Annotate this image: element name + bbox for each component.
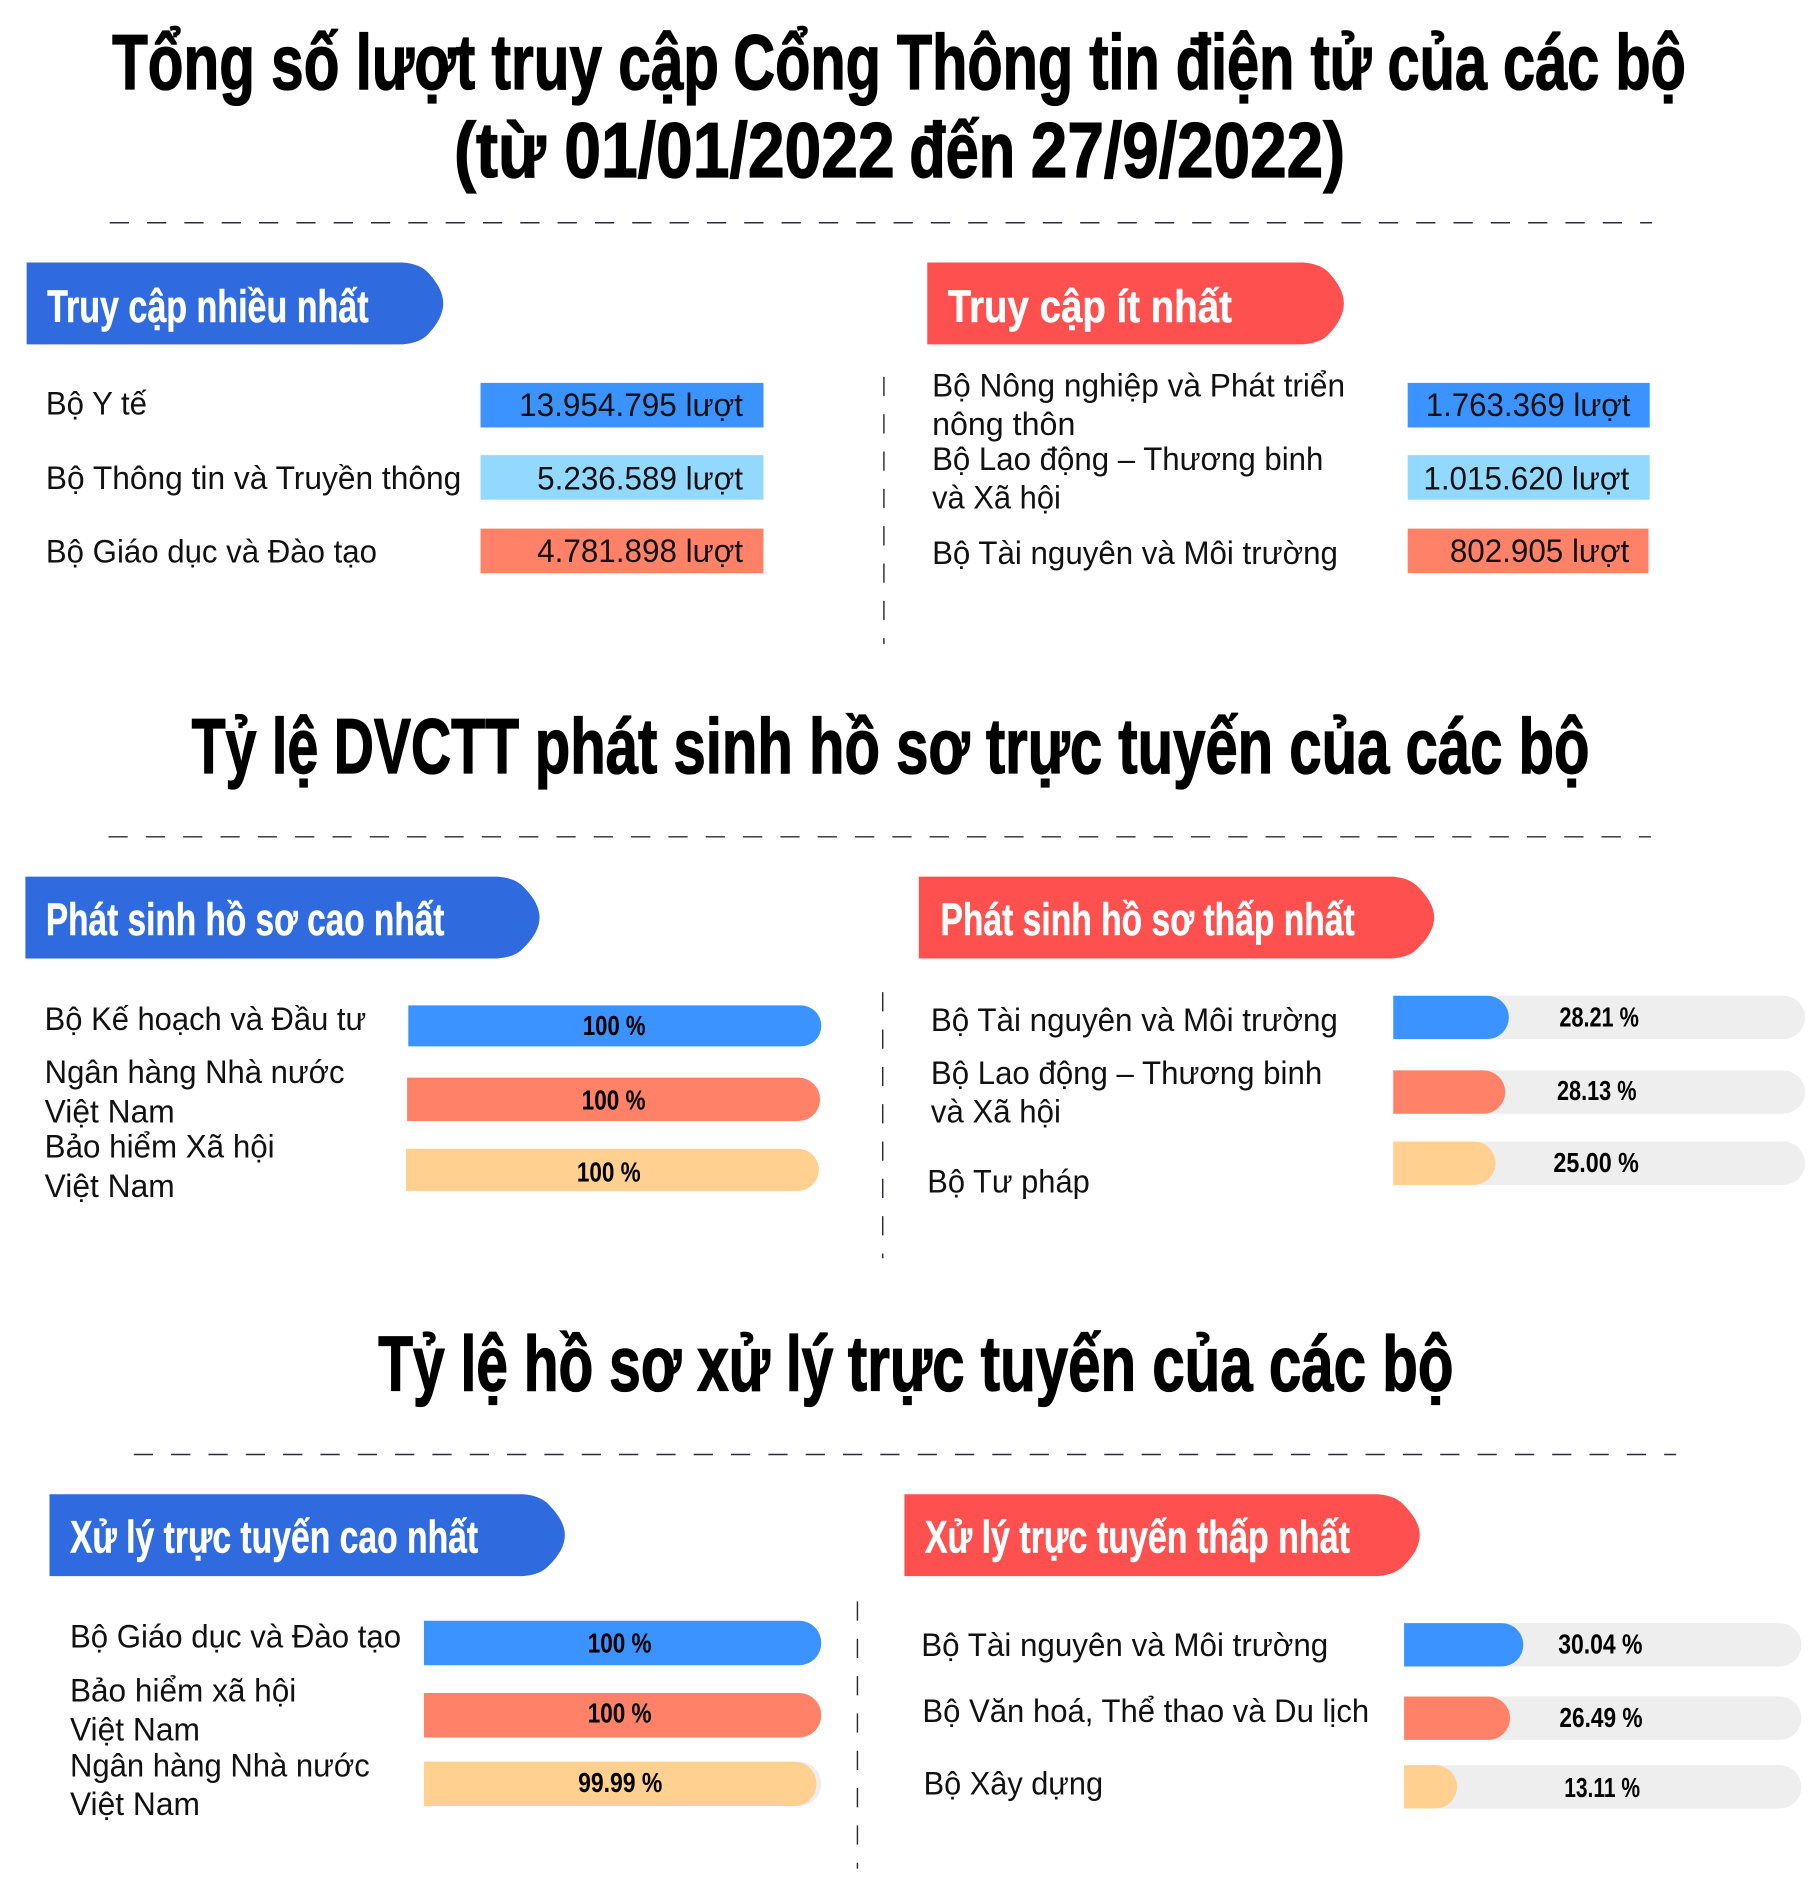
title: online application rate <box>192 702 1590 790</box>
row: Bảo hiểm xã hội Việt Nam: 100 % <box>588 1697 652 1728</box>
row: Bộ Lao động – Thương binh và Xã hội: và Xã hội <box>932 479 1061 515</box>
row: Bộ Lao động – Thương binh và Xã hội: Bộ Lao động – Thương binh <box>932 441 1323 477</box>
row: Bộ Lao động – Thương binh và Xã hội: Bộ Lao động – Thương binh <box>931 1055 1322 1091</box>
row: Ngân hàng Nhà nước Việt Nam <box>45 1054 820 1130</box>
heading badge: lowest application rate <box>919 877 1434 958</box>
row: Bộ Thông tin và Truyền thông: Bộ Thông tin và Truyền thông <box>46 460 461 496</box>
row: Bộ Tài nguyên và Môi trường <box>932 529 1649 573</box>
row: Bộ Tài nguyên và Môi trường: 802.905 lượt <box>1450 533 1629 569</box>
heading badge: lowest processing rate: Xử lý trực tuyến thấp nhất <box>925 1512 1350 1563</box>
row: Bộ Thông tin và Truyền thông <box>46 455 764 500</box>
heading badge: highest application rate <box>25 877 540 958</box>
heading badge: highest processing rate: Xử lý trực tuyến cao nhất <box>70 1512 478 1563</box>
row: Bảo hiểm xã hội Việt Nam: Việt Nam <box>70 1711 200 1747</box>
title: online application rate: Tỷ lệ DVCTT <box>192 702 519 790</box>
row: Bộ Giáo dục và Đào tạo: 100 % <box>588 1627 652 1658</box>
row: Bộ Tài nguyên và Môi trường: 30.04 % <box>1558 1629 1642 1660</box>
row: Bộ Y tế: Bộ Y tế <box>46 386 147 422</box>
row: Bộ Giáo dục và Đào tạo: 4.781.898 lượt <box>537 533 743 569</box>
row: Bảo hiểm Xã hội Việt Nam: 100 % <box>577 1157 641 1188</box>
row: Bộ Y tế: 13.954.795 lượt <box>519 387 743 423</box>
row: Bộ Kế hoạch và Đầu tư: 100 % <box>583 1010 646 1041</box>
panel: lowest processing rate <box>904 1494 1801 1809</box>
row: Bộ Lao động – Thương binh và Xã hội <box>932 441 1650 515</box>
row: Bộ Lao động – Thương binh và Xã hội: và Xã hội <box>931 1094 1061 1130</box>
row: Bảo hiểm Xã hội Việt Nam <box>45 1128 819 1204</box>
title: total visits: 27/9/2022) <box>1031 106 1345 194</box>
title: total visits: đến <box>909 106 1015 194</box>
row: Bộ Tư pháp: Bộ Tư pháp <box>927 1163 1090 1199</box>
panel: highest application rate <box>25 877 821 1204</box>
row: Bộ Y tế <box>46 383 764 427</box>
row: Bộ Tài nguyên và Môi trường: Bộ Tài nguyên và Môi trường <box>921 1627 1328 1663</box>
row: Bảo hiểm xã hội Việt Nam: Bảo hiểm xã hội <box>70 1673 296 1709</box>
heading badge: most visited <box>27 262 443 344</box>
row: Bộ Lao động – Thương binh và Xã hội: 1.015.620 lượt <box>1423 461 1629 497</box>
row: Bộ Thông tin và Truyền thông: 5.236.589 lượt <box>537 461 743 497</box>
heading badge: most visited: Truy cập nhiều nhất <box>47 281 369 332</box>
row: Ngân hàng Nhà nước Việt Nam: Ngân hàng Nhà nước <box>45 1054 344 1090</box>
row: Bộ Tài nguyên và Môi trường: Bộ Tài nguyên và Môi trường <box>931 1002 1338 1038</box>
panel: highest processing rate <box>49 1494 821 1822</box>
title: total visits <box>112 18 1686 194</box>
row: Bộ Giáo dục và Đào tạo: Bộ Giáo dục và Đào tạo <box>70 1619 401 1655</box>
row: Bộ Văn hoá, Thể thao và Du lịch <box>922 1693 1801 1740</box>
row: Bộ Giáo dục và Đào tạo <box>46 529 764 573</box>
row: Ngân hàng Nhà nước Việt Nam: Ngân hàng Nhà nước <box>70 1747 370 1783</box>
title: online processing rate <box>378 1320 1453 1408</box>
row: Bộ Tư pháp: 25.00 % <box>1553 1147 1639 1178</box>
title: online processing rate: trực tuyến của các bộ <box>848 1320 1453 1408</box>
row: Bộ Xây dựng: Bộ Xây dựng <box>924 1765 1103 1801</box>
row: Bảo hiểm xã hội Việt Nam <box>70 1673 821 1747</box>
row: Bộ Văn hoá, Thể thao và Du lịch: 26.49 % <box>1559 1702 1642 1733</box>
row: Bảo hiểm Xã hội Việt Nam: Bảo hiểm Xã hội <box>45 1128 275 1164</box>
row: Bộ Nông nghiệp và Phát triển nông thôn: nông thôn <box>932 406 1075 442</box>
row: Bộ Xây dựng <box>924 1765 1801 1809</box>
title: online processing rate: Tỷ lệ hồ sơ xử lý <box>378 1320 834 1408</box>
panel: least visited <box>927 262 1650 573</box>
heading badge: highest processing rate <box>49 1494 565 1576</box>
row: Bộ Nông nghiệp và Phát triển nông thôn: Bộ Nông nghiệp và Phát triển <box>932 368 1345 404</box>
row: Ngân hàng Nhà nước Việt Nam: 100 % <box>582 1084 646 1115</box>
row: Bộ Văn hoá, Thể thao và Du lịch: Bộ Văn hoá, Thể thao và Du lịch <box>922 1693 1369 1729</box>
panel: most visited <box>27 262 764 573</box>
heading badge: least visited <box>927 262 1344 344</box>
row: Bộ Tài nguyên và Môi trường: Bộ Tài nguyên và Môi trường <box>932 535 1338 571</box>
row: Bộ Xây dựng: 13.11 % <box>1564 1772 1640 1803</box>
row: Bộ Giáo dục và Đào tạo: Bộ Giáo dục và Đào tạo <box>46 534 377 570</box>
heading badge: lowest application rate: Phát sinh hồ sơ thấp nhất <box>941 894 1355 945</box>
row: Bộ Tài nguyên và Môi trường: 28.21 % <box>1559 1001 1639 1032</box>
row: Bộ Tài nguyên và Môi trường <box>921 1623 1801 1666</box>
row: Ngân hàng Nhà nước Việt Nam <box>70 1747 821 1822</box>
title: total visits: (từ 01/01/2022 <box>454 106 895 194</box>
row: Bộ Giáo dục và Đào tạo <box>70 1619 821 1665</box>
row: Ngân hàng Nhà nước Việt Nam: 99.99 % <box>578 1767 662 1798</box>
row: Bộ Kế hoạch và Đầu tư: Bộ Kế hoạch và Đầu tư <box>45 1001 366 1037</box>
panel: lowest application rate <box>919 877 1805 1199</box>
row: Bảo hiểm Xã hội Việt Nam: Việt Nam <box>45 1168 175 1204</box>
title: total visits: Tổng số lượt truy cập <box>112 18 719 106</box>
row: Ngân hàng Nhà nước Việt Nam: Việt Nam <box>45 1094 175 1130</box>
row: Bộ Lao động – Thương binh và Xã hội: 28.13 % <box>1557 1075 1636 1106</box>
row: Bộ Tư pháp <box>927 1141 1805 1199</box>
row: Bộ Nông nghiệp và Phát triển nông thôn <box>932 368 1650 442</box>
heading badge: lowest processing rate <box>904 1494 1420 1576</box>
row: Bộ Nông nghiệp và Phát triển nông thôn: 1.763.369 lượt <box>1426 387 1630 423</box>
row: Bộ Lao động – Thương binh và Xã hội <box>931 1055 1805 1130</box>
row: Bộ Kế hoạch và Đầu tư <box>45 1001 821 1046</box>
row: Bộ Tài nguyên và Môi trường <box>931 996 1805 1039</box>
heading badge: highest application rate: Phát sinh hồ sơ cao nhất <box>46 894 444 945</box>
row: Ngân hàng Nhà nước Việt Nam: Việt Nam <box>70 1786 200 1822</box>
heading badge: least visited: Truy cập ít nhất <box>948 281 1232 332</box>
